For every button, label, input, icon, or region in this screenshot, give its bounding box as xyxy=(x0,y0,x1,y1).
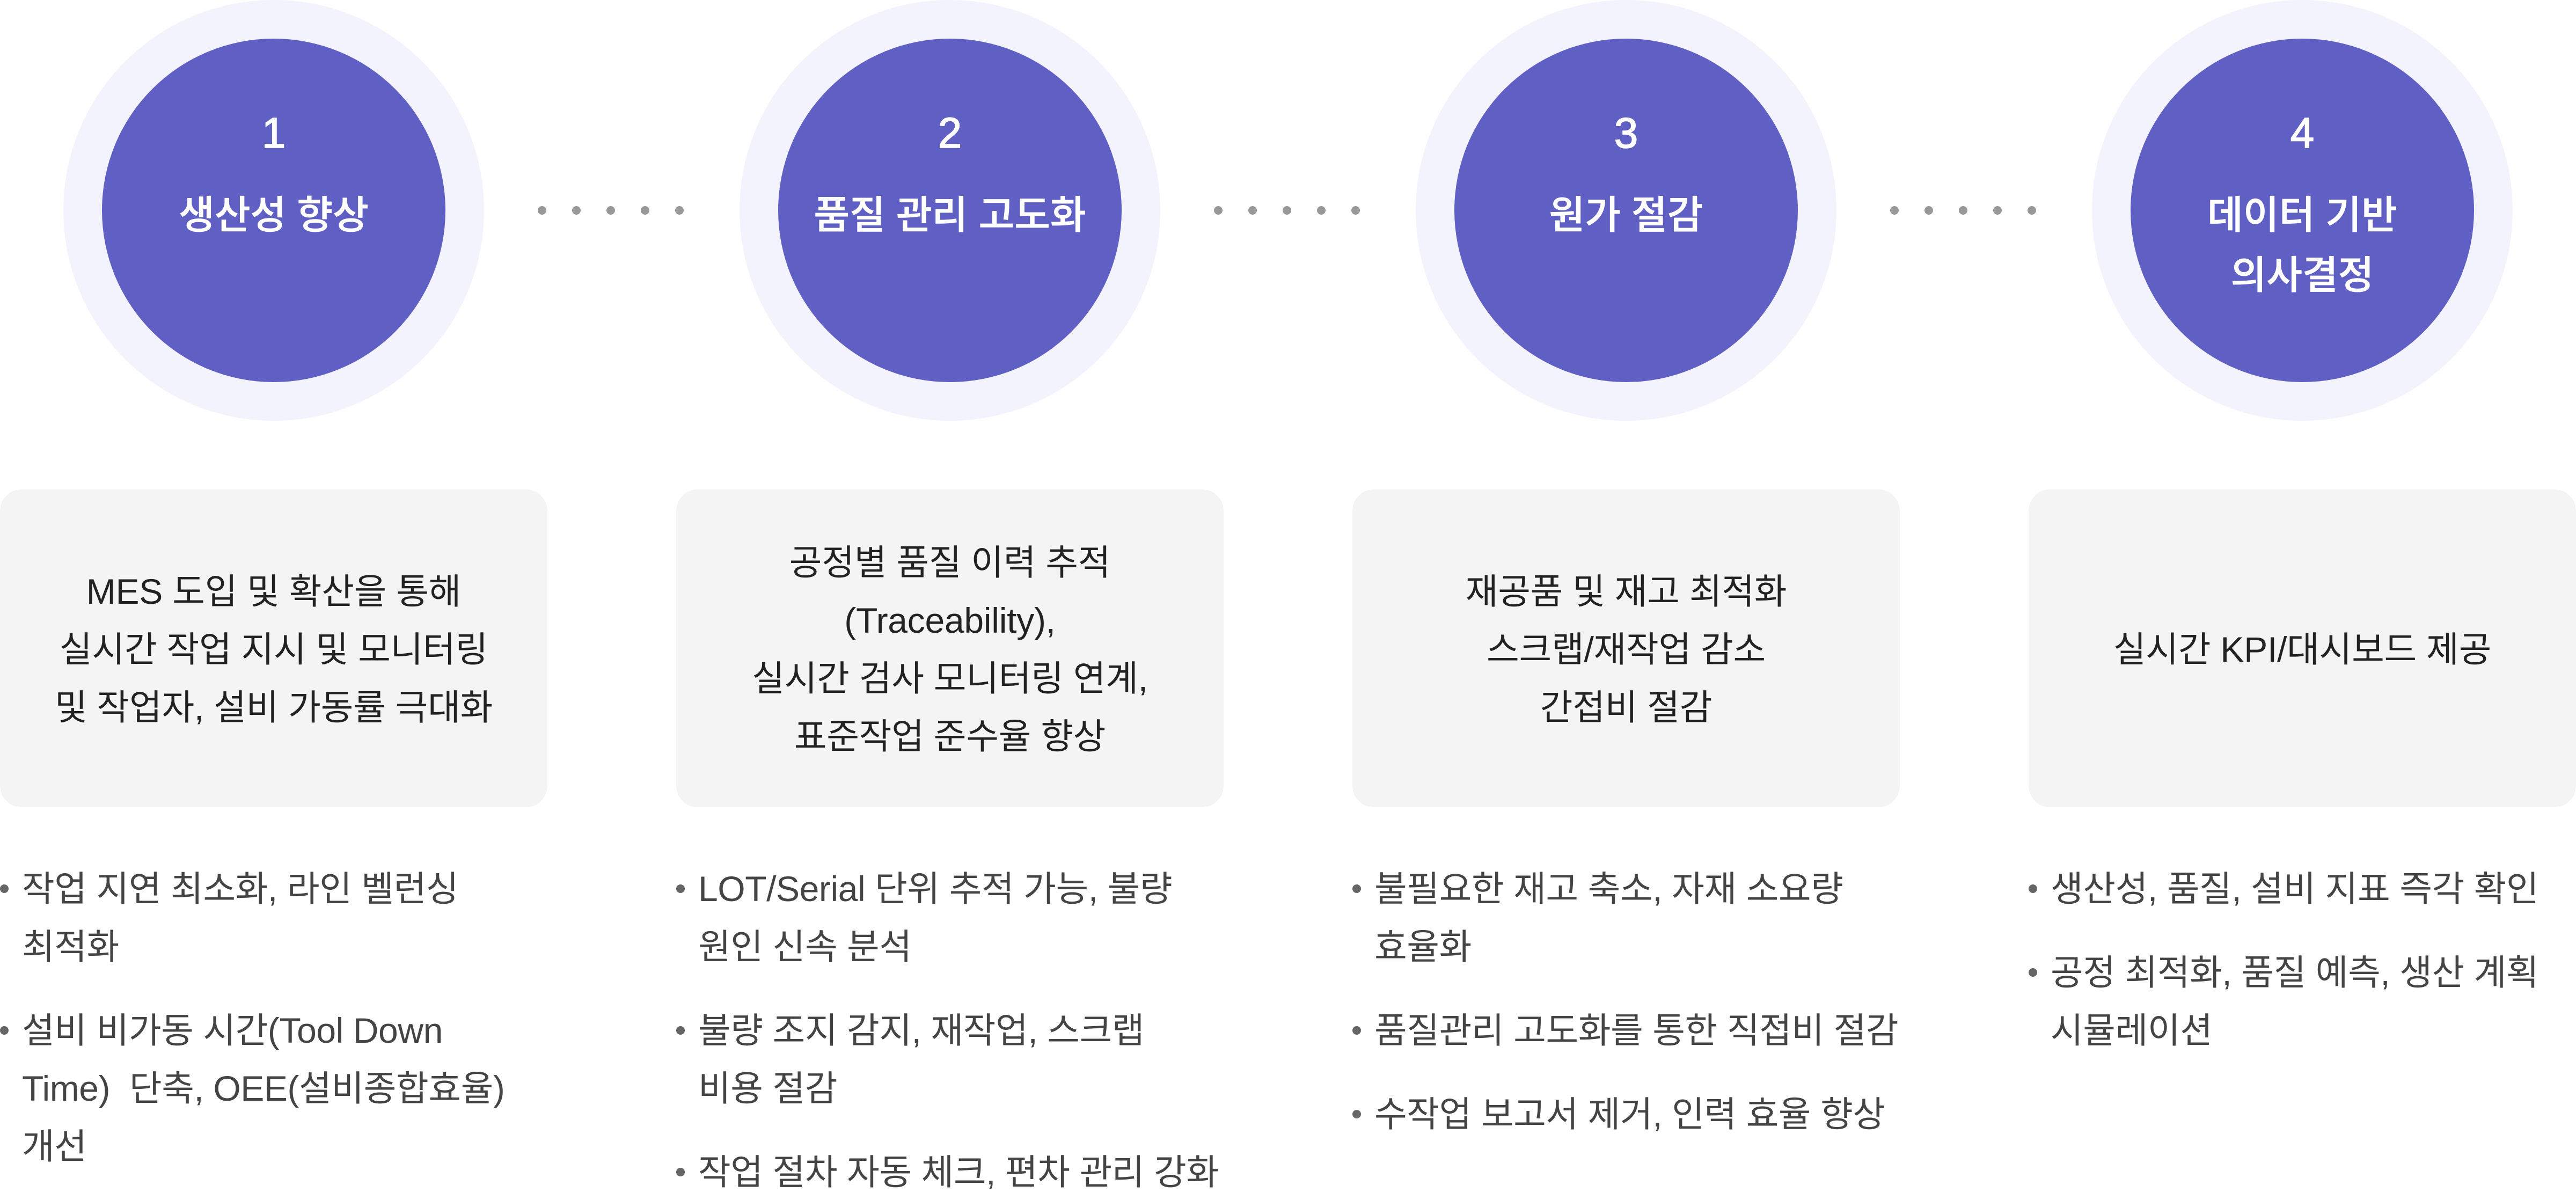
bullet list 1: 개선 xyxy=(22,1126,87,1166)
heading: data-driven decisions xyxy=(2207,194,2397,297)
bullet list 4 xyxy=(2029,869,2538,1050)
heading: data-driven decisions: 데이터 기반 xyxy=(2207,194,2397,237)
heading: data-driven decisions: 의사결정 xyxy=(2231,254,2374,297)
panel: summary card 4: 실시간 KPI/대시보드 제공 xyxy=(2113,630,2491,669)
panel: summary card 2 xyxy=(676,489,1224,807)
number 2: 2 xyxy=(938,109,962,157)
bullet list 3: 품질관리 고도화를 통한 직접비 절감 xyxy=(1374,1011,1898,1050)
bullet list 3 xyxy=(1352,869,1898,1134)
number 1: 1 xyxy=(262,109,286,157)
panel: summary card 3 xyxy=(1352,489,1900,807)
bullet list 2: LOT/Serial 단위 추적 가능, 불량 xyxy=(698,869,1172,909)
bullet list 2: 비용 절감 xyxy=(698,1069,837,1108)
heading: productivity: 생산성 향상 xyxy=(179,194,369,237)
bullet list 1: 작업 지연 최소화, 라인 벨런싱 xyxy=(22,869,458,909)
bullet list 1: 설비 비가동 시간(Tool Down xyxy=(22,1011,443,1050)
bullet list 2: 작업 절차 자동 체크, 편차 관리 강화 xyxy=(698,1152,1219,1192)
bullet list 4: 시뮬레이션 xyxy=(2051,1011,2212,1050)
bullet list 2: 원인 신속 분석 xyxy=(698,927,912,967)
heading: quality: 품질 관리 고도화 xyxy=(814,194,1086,237)
bullet list 1 xyxy=(0,869,504,1166)
bullet list 2: 불량 조지 감지, 재작업, 스크랩 xyxy=(698,1011,1144,1050)
panel: summary card 2: (Traceability), xyxy=(844,601,1056,640)
connector dots 1 xyxy=(538,206,684,215)
panel: summary card 4 xyxy=(2029,489,2576,807)
bullet list 4: 생산성, 품질, 설비 지표 즉각 확인 xyxy=(2051,869,2538,909)
connector dots 3 xyxy=(1890,206,2036,215)
bullet list 1: 최적화 xyxy=(22,927,119,967)
panel: summary card 2: 공정별 품질 이력 추적 xyxy=(789,543,1110,582)
heading: cost: 원가 절감 xyxy=(1549,194,1703,237)
panel: summary card 1: 및 작업자, 설비 가동률 극대화 xyxy=(55,687,493,727)
bullet list 4: 공정 최적화, 품질 예측, 생산 계획 xyxy=(2051,953,2538,992)
bullet list 1: Time) 단축, OEE(설비종합효율) xyxy=(22,1069,504,1108)
step circle 2 xyxy=(740,0,1160,421)
panel: summary card 1 xyxy=(0,489,547,807)
panel: summary card 3: 스크랩/재작업 감소 xyxy=(1487,630,1766,669)
number 3: 3 xyxy=(1614,109,1638,157)
panel: summary card 1: 실시간 작업 지시 및 모니터링 xyxy=(60,630,488,669)
panel: summary card 2: 실시간 검사 모니터링 연계, xyxy=(752,658,1148,698)
step circle 3 xyxy=(1416,0,1836,421)
bullet list 2 xyxy=(676,869,1219,1192)
number 4: 4 xyxy=(2290,109,2314,157)
panel: summary card 2: 표준작업 준수율 향상 xyxy=(794,716,1106,756)
bullet list 3: 불필요한 재고 축소, 자재 소요량 xyxy=(1374,869,1843,909)
bullet list 3: 수작업 보고서 제거, 인력 효율 향상 xyxy=(1374,1094,1885,1134)
panel: summary card 3: 재공품 및 재고 최적화 xyxy=(1466,572,1787,611)
bullet list 3: 효율화 xyxy=(1374,927,1472,967)
connector dots 2 xyxy=(1214,206,1360,215)
step circle 4 xyxy=(2092,0,2513,421)
step circle 1 xyxy=(63,0,484,421)
panel: summary card 3: 간접비 절감 xyxy=(1540,687,1712,727)
panel: summary card 1: MES 도입 및 확산을 통해 xyxy=(86,572,461,611)
